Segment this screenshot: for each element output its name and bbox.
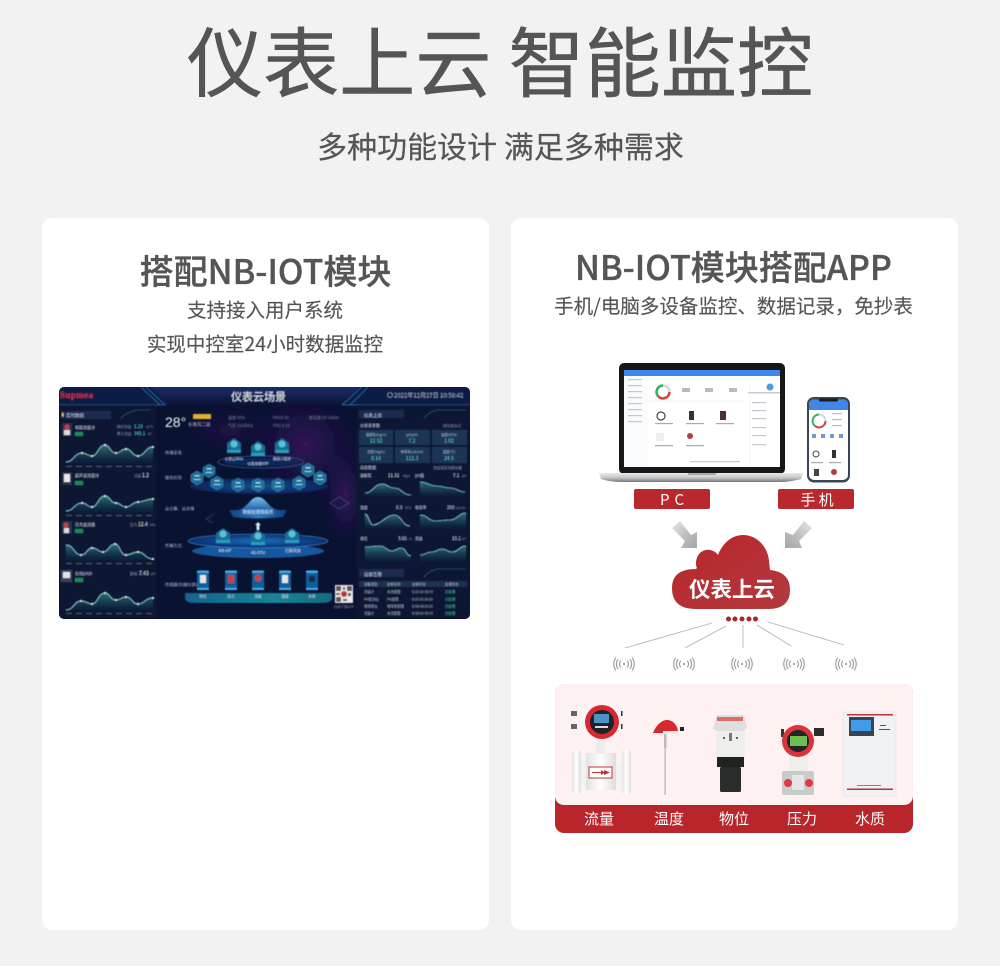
weather readout: 东南风二级 (188, 421, 211, 428)
QR code: 扫码下载APP (334, 604, 354, 609)
device alarm table (359, 569, 467, 616)
dynamic data mini charts: NTU (405, 506, 411, 510)
dynamic data mini charts: 7.1 (453, 473, 460, 479)
dashboard header bar (59, 387, 470, 405)
architecture layer labels: 云计算、云存储 (165, 505, 194, 512)
architecture layer labels: 传感器(仪器仪表) (165, 581, 198, 588)
left panel description line 2: 实现中控室24小时数据监控 (147, 328, 383, 357)
right column: instrument cloud: 动态数据 (360, 464, 376, 471)
left panel heading: 搭配NB-IOT模块 (140, 245, 391, 294)
right column: instrument cloud: 浓度(mg/L) (367, 449, 385, 454)
sensor row: pressure transmitter: kPa (150, 523, 155, 527)
dynamic data mini charts: 液位 (360, 536, 368, 542)
sensor row: electromagnetic flow meter: 瞬时流量 (117, 424, 132, 430)
layer: sensors (185, 570, 332, 603)
sensor row: ultrasonic flow meter: 超声波流量计 (75, 472, 99, 479)
sensor row: online pH meter: pH (151, 572, 155, 576)
panel: NB-IOT module with APP (511, 218, 958, 930)
title: 仪表上云 智能监控 (187, 3, 813, 113)
dynamic data mini charts: 溶解氧 (360, 473, 372, 479)
dynamic data mini charts: 0.3 (396, 505, 403, 511)
phone label (778, 489, 854, 510)
instrument: temperature sensor (653, 720, 684, 795)
dynamic data mini charts: pH (462, 474, 466, 478)
connection dots (726, 616, 758, 622)
sensor row: electromagnetic flow meter: 电磁流量计 (75, 424, 95, 431)
instrument: flow meter (571, 705, 631, 794)
weather readout: 气压 1018hPa (228, 422, 253, 429)
dynamic data mini charts: 280 (447, 505, 455, 511)
sensor row: online pH meter: 酸碱 (130, 571, 138, 577)
architecture layer labels: 服务应用 (165, 474, 182, 481)
device alarm table: 9/21 10:32:33 (412, 589, 433, 594)
device alarm table: 设备告警 (364, 571, 382, 578)
dynamic data mini charts: 电导率 (415, 505, 427, 511)
dynamic data mini charts: m (409, 537, 412, 541)
dynamic data mini charts: 15.1 (452, 536, 461, 542)
architecture layer labels (165, 449, 198, 588)
PC label: PC (660, 489, 689, 510)
layer: transmission (188, 528, 328, 558)
dynamic data mini charts: 11.32 (388, 473, 400, 479)
left panel description line 1: 支持接入用户系统 (187, 294, 343, 323)
QR code (334, 585, 354, 609)
right column: instrument cloud: 8.14 (371, 455, 381, 462)
sensor row: ultrasonic flow meter: 1.2 (142, 472, 149, 479)
weather readout: 能见度 20~30km (309, 414, 339, 421)
left column: real-time data (59, 405, 157, 619)
right column: instrument cloud: 水质多参数 (360, 422, 380, 429)
sensor row: pressure transmitter (62, 521, 155, 564)
laptop with PC interface (599, 363, 803, 482)
arrow: PC to cloud (672, 521, 697, 548)
monitoring dashboard screenshot (59, 387, 470, 619)
sensor row: pressure transmitter: 压力变送器 (75, 521, 95, 528)
sensor row: electromagnetic flow meter (62, 423, 155, 466)
device alarm table: 水流超限 (387, 610, 401, 616)
weather readout: PM10 39 (273, 415, 289, 421)
layer: sensors: 水质 (308, 594, 316, 600)
cloud: instrument cloud: 仪表上云 (689, 573, 775, 604)
instrument labels: 流量 (584, 808, 614, 829)
sensor row: electromagnetic flow meter: 345.1 (134, 431, 146, 437)
sensor row: electromagnetic flow meter: m³/h (146, 424, 153, 429)
layer: terminal display: 微信小程序 (273, 456, 291, 462)
device alarm table: 设备类型 (364, 582, 378, 586)
water quality parameter cards (359, 430, 467, 463)
sensor row: pressure transmitter: 压力 (130, 522, 138, 528)
layer: transmission: NB-IoT (219, 548, 232, 554)
device alarm table: 水流超限 (387, 589, 401, 594)
dynamic data mini charts: m³ (462, 536, 467, 541)
device alarm table: 告警名称 (387, 582, 401, 586)
right column: instrument cloud: 排污进水口 (443, 423, 461, 429)
right column: instrument cloud: 1.02 (444, 438, 454, 444)
architecture layer labels: 终端呈现 (165, 449, 182, 456)
device alarm table: 已处理 (445, 596, 456, 602)
instrument labels: 温度 (654, 808, 684, 829)
device alarm table: 处理状态 (445, 582, 459, 586)
phone label: 手 机 (800, 489, 834, 510)
dashboard header bar: 2022年12月27日 10:58:42 (394, 390, 464, 400)
device alarm table: 流量计 (364, 610, 375, 616)
instrument labels: 物位 (719, 808, 749, 829)
instrument labels (584, 808, 885, 829)
sensor row: online pH meter: 在线pH计 (75, 570, 92, 577)
panel: NB-IOT module dashboard (42, 218, 958, 930)
sensor row: electromagnetic flow meter: m³ (148, 431, 153, 436)
right column: instrument cloud: 温度(℃) (443, 449, 455, 454)
dynamic data mini charts: 浊度 (360, 505, 368, 511)
dynamic data mini charts: 3.65 (398, 536, 407, 542)
dynamic data mini charts (360, 473, 467, 562)
wireless signal icons (614, 658, 856, 670)
right column: instrument cloud: 流量液压充稳水器 (433, 465, 462, 471)
weather readout: 28° (165, 414, 186, 430)
layer: terminal display: 仪表云Web (225, 456, 244, 462)
device alarm table: 9/18 08:20:10 (412, 604, 433, 608)
dashboard header bar: 仪表云场景 (231, 388, 286, 404)
device alarm table: 已处理 (445, 589, 456, 594)
right column: instrument cloud: 12.52 (370, 438, 382, 444)
subtitle: 多种功能设计 满足多种需求 (317, 123, 684, 167)
layer: cloud computing: 数据处理微服务 (243, 508, 274, 516)
dynamic data mini charts: mg/L (403, 474, 411, 478)
phone with mobile app (807, 397, 850, 482)
weather readout: 湿度 40% (228, 414, 245, 421)
instrument: level meter (713, 715, 747, 792)
device alarm table: 已处理 (445, 610, 456, 616)
layer: cloud computing (206, 497, 349, 530)
layer: terminal display: 仪表查看APP (247, 461, 269, 467)
dashboard background glows (200, 405, 356, 534)
device alarm table: 已处理 (445, 604, 456, 608)
dynamic data mini charts: 流量 (415, 536, 423, 542)
device alarm table: PH超限 (387, 596, 399, 602)
instrument: pressure transmitter (781, 725, 824, 795)
PC label (634, 489, 710, 510)
right column: instrument cloud: 7.2 (409, 438, 416, 444)
instrument panel (555, 684, 913, 833)
device alarm table: PH检测仪 (364, 596, 379, 602)
left column: real-time data: 实时数据 (66, 412, 84, 419)
sensor row: pressure transmitter: 12.4 (138, 521, 148, 528)
device alarm table: 电导率仪 (364, 604, 378, 608)
right column: instrument cloud (356, 405, 470, 619)
right column: instrument cloud: 溶解氧(mg/L) (366, 432, 386, 437)
instrument: water quality cabinet (843, 712, 896, 796)
layer: sensors: 物位 (199, 594, 207, 600)
device alarm table: 电导率超限 (387, 604, 405, 608)
right column: instrument cloud: pH(pH) (406, 432, 418, 437)
instrument labels: 水质 (855, 808, 885, 829)
cloud: instrument cloud (672, 535, 790, 609)
dynamic data mini charts: μS/cm (456, 506, 465, 510)
sensor row: online pH meter: 7.43 (139, 570, 149, 577)
right column: instrument cloud: 浊度(NTU) (441, 432, 457, 437)
layer: terminal display (218, 438, 304, 468)
weather readout (165, 414, 339, 430)
device alarm table: 9/20 15:20:10 (412, 596, 433, 602)
sensor row: ultrasonic flow meter (62, 472, 155, 516)
weather readout: PM2.5 18 (273, 423, 290, 429)
device alarm table: 告警时间 (412, 582, 426, 586)
right column: instrument cloud: 仪表上云 (364, 412, 382, 419)
connection lines (625, 622, 844, 648)
right panel heading: NB-IOT模块搭配APP (575, 241, 892, 290)
right column: instrument cloud: 电导率(μS/cm) (401, 449, 423, 454)
device alarm table: 流量计 (364, 589, 375, 594)
arrow: phone to cloud (785, 521, 812, 548)
instrument labels: 压力 (787, 808, 817, 829)
sensor row: ultrasonic flow meter: 流量 (134, 473, 142, 479)
dashboard header bar: Supmea (60, 390, 94, 400)
right column: instrument cloud: 24.5 (444, 455, 454, 462)
right column: instrument cloud: 112.3 (406, 455, 418, 462)
sensor row: electromagnetic flow meter: 累计流量 (117, 431, 132, 437)
sensor row: electromagnetic flow meter: 1.23 (134, 424, 143, 430)
device alarm table: 9/18 10:32:33 (412, 610, 433, 616)
layer: sensors: 温度 (281, 594, 289, 600)
layer: sensors: 流量 (254, 594, 262, 600)
layer: transmission: 已联网关 (285, 547, 301, 554)
sensor row: online pH meter (61, 570, 155, 614)
right panel description: 手机/电脑多设备监控、数据记录，免抄表 (554, 290, 913, 319)
layer: sensors: 压力 (227, 594, 235, 600)
architecture layer labels: 传输方式 (165, 542, 183, 549)
layer: transmission: 4G-DTU (251, 550, 265, 556)
layer: service applications (190, 463, 328, 494)
dynamic data mini charts: pH值 (415, 473, 424, 479)
